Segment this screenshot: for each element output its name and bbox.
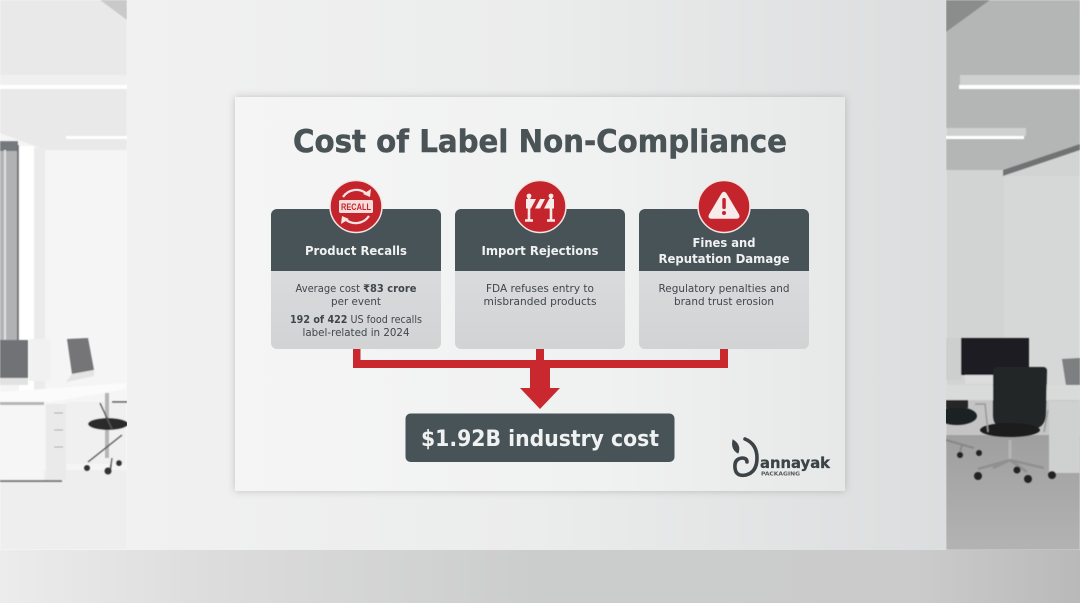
text: import facts: misbranded products xyxy=(484,296,596,308)
text: import facts xyxy=(484,283,596,308)
card body xyxy=(271,209,441,349)
floor xyxy=(0,550,1080,603)
panel: product recalls xyxy=(271,180,441,349)
text: recall facts: per event xyxy=(331,296,381,308)
card header xyxy=(271,209,441,271)
heading: fines and reputation damage: Fines and xyxy=(692,235,756,250)
panel: fines and reputation damage xyxy=(639,180,809,349)
poster board xyxy=(235,97,845,491)
text: recall facts: Average cost ₹83 crore xyxy=(296,283,416,295)
heading: fines and reputation damage xyxy=(658,235,790,266)
heading: product recalls: Product Recalls xyxy=(305,243,407,258)
callout: industry cost xyxy=(406,414,674,462)
text: recall facts: 192 of 422 US food recalls xyxy=(290,314,422,326)
text: recall facts: label-related in 2024 xyxy=(302,327,410,339)
right office room xyxy=(946,0,1080,550)
logo subtitle: PACKAGING xyxy=(761,472,801,478)
text: import facts: FDA refuses entry to xyxy=(486,283,594,295)
icon: elephant mark xyxy=(733,439,757,475)
text: fines facts: Regulatory penalties and xyxy=(658,283,790,295)
right desks with monitor and chair xyxy=(937,338,1080,483)
icon: road barrier xyxy=(514,180,566,232)
connector arrow xyxy=(353,349,728,409)
left office room xyxy=(0,0,127,550)
callout: industry cost: $1.92B industry cost xyxy=(421,427,659,452)
card header xyxy=(639,209,809,271)
title: Cost of Label Non-Compliance xyxy=(293,124,787,160)
icon: recall badge: RECALL xyxy=(341,202,371,212)
card header xyxy=(455,209,625,271)
icon: recall badge xyxy=(330,180,382,232)
card body xyxy=(455,209,625,349)
text: recall facts xyxy=(290,283,422,339)
heading: import rejections: Import Rejections xyxy=(482,243,598,258)
card body xyxy=(639,209,809,349)
left desks with monitors and chair xyxy=(0,338,128,482)
logo xyxy=(733,439,831,478)
heading: fines and reputation damage: Reputation Damage xyxy=(658,251,790,266)
icon: warning triangle xyxy=(698,180,750,232)
text: fines facts: brand trust erosion xyxy=(674,296,774,308)
central wall xyxy=(127,0,946,550)
logo wordmark: annayak xyxy=(760,454,831,472)
panel: import rejections xyxy=(455,180,625,349)
text: fines facts xyxy=(658,283,790,308)
